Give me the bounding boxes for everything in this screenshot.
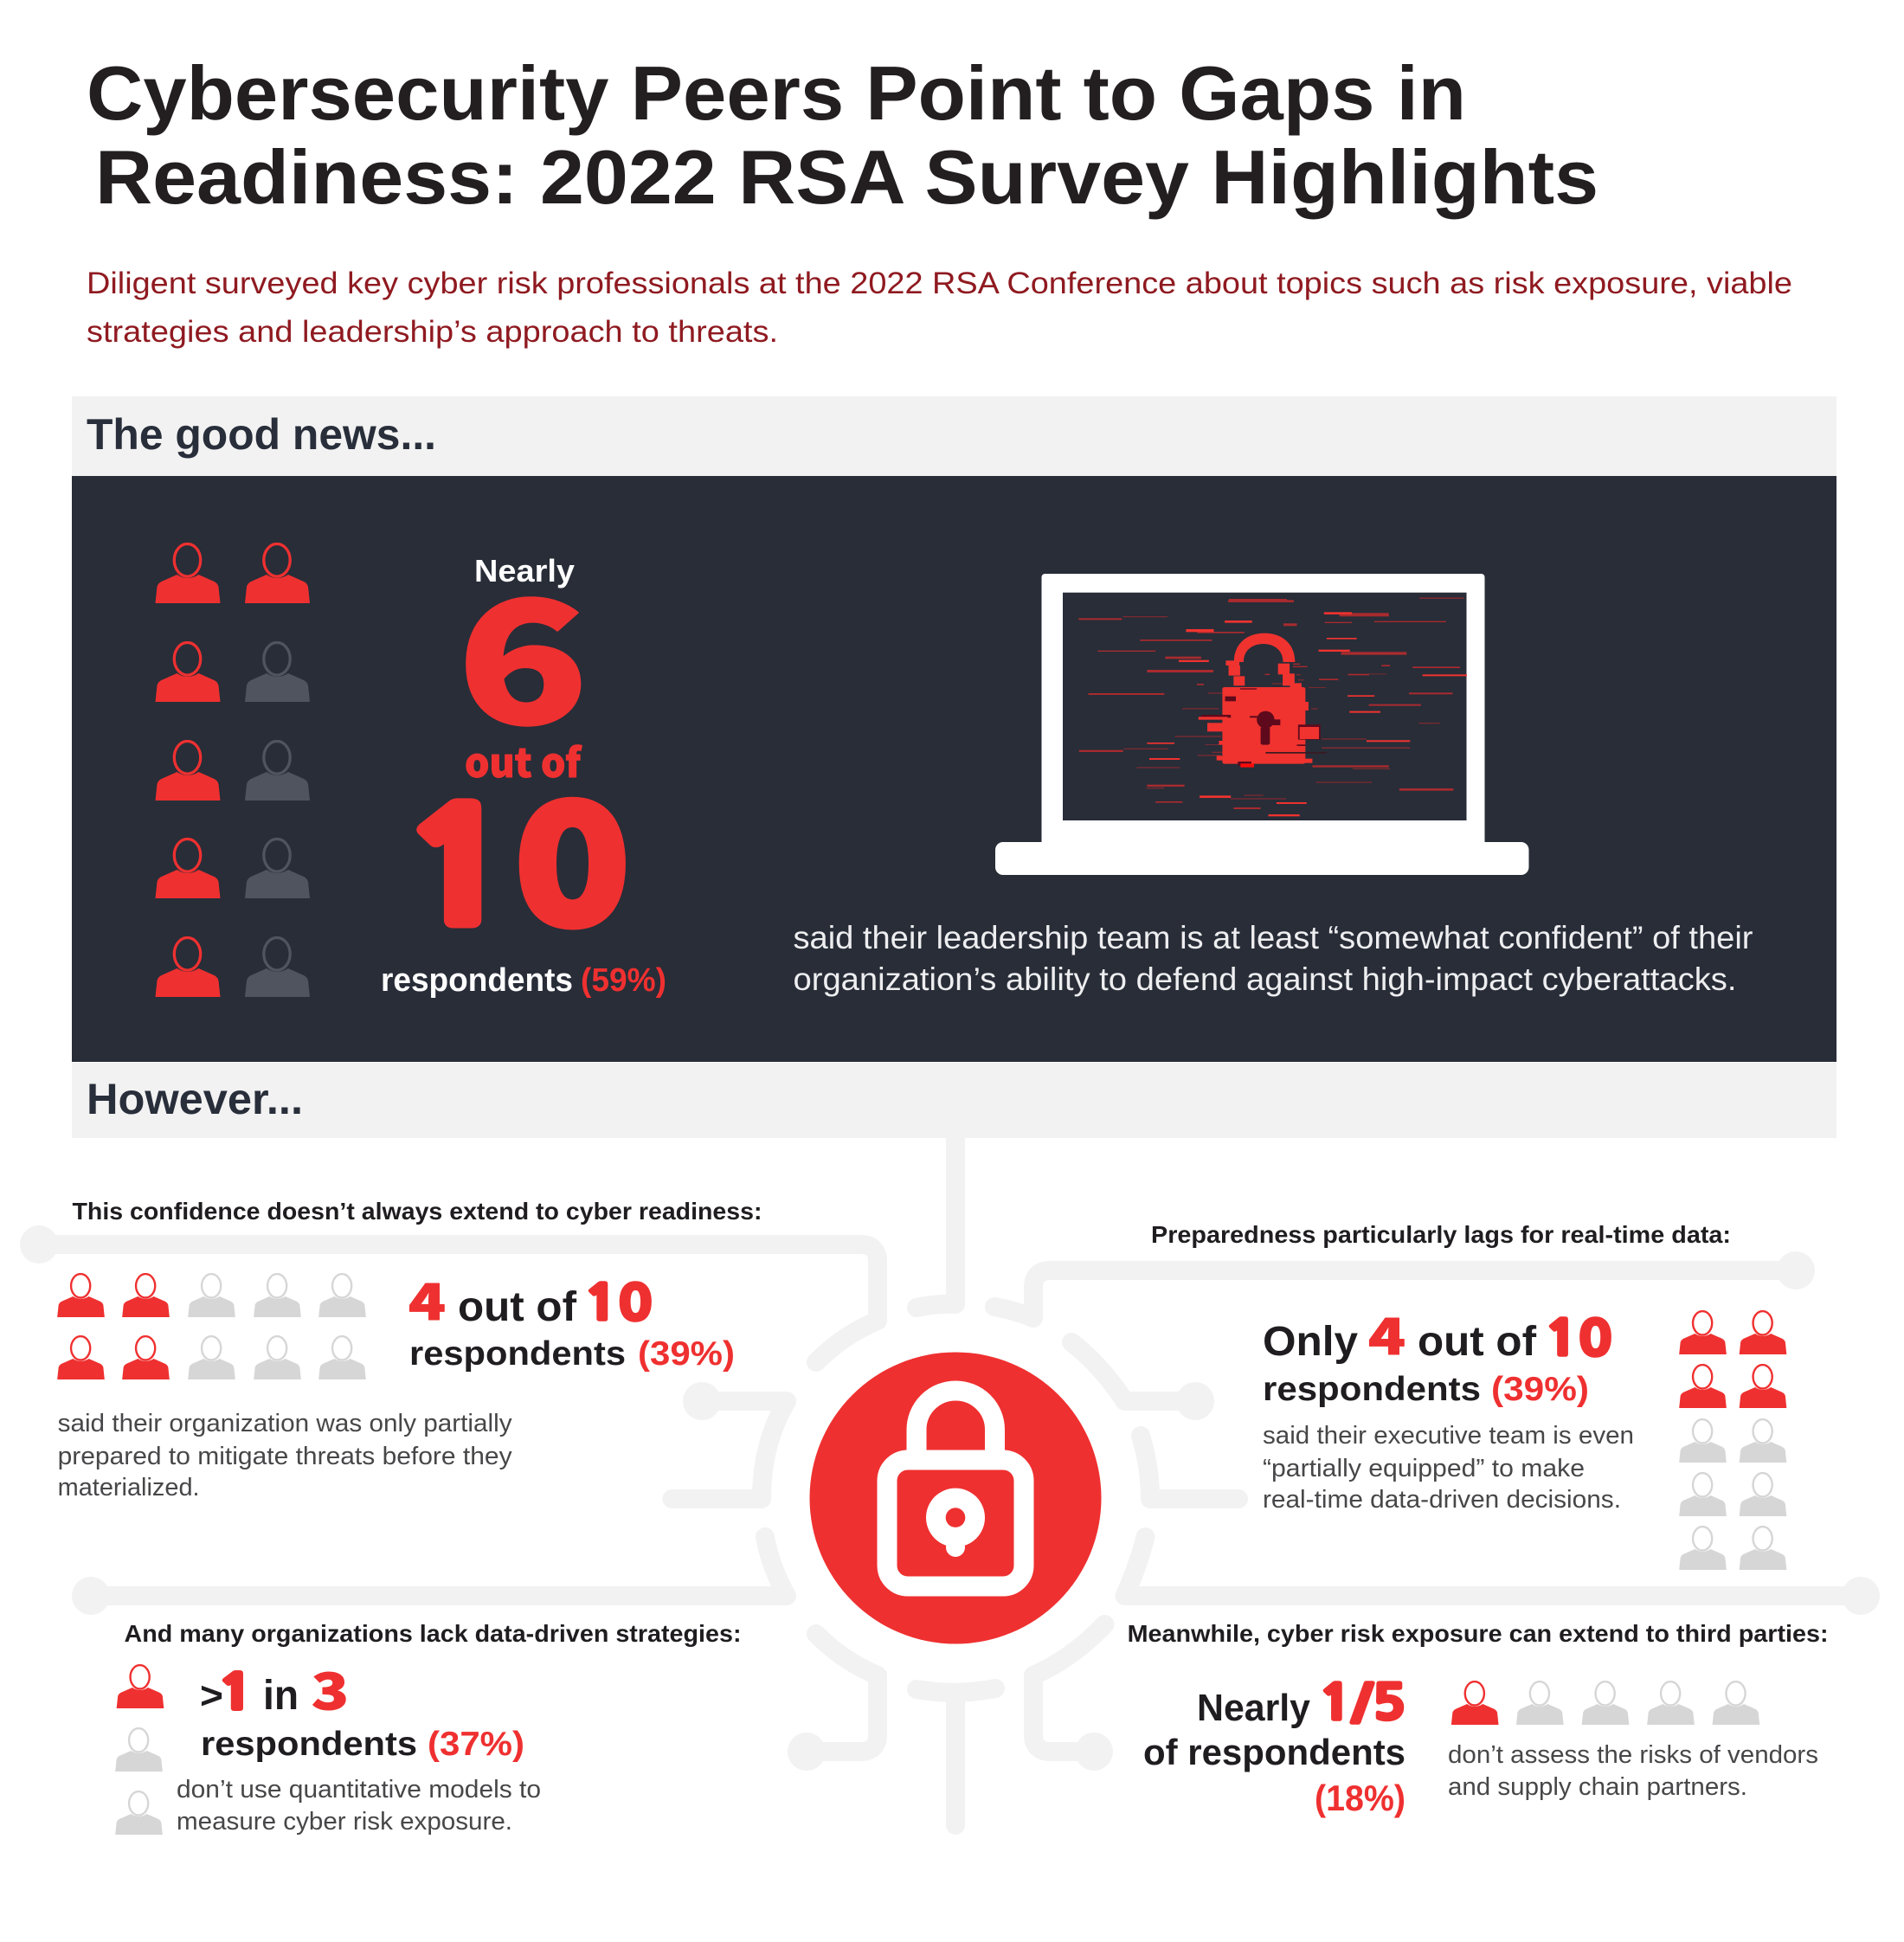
intro text: [87, 267, 1792, 349]
stat: only 4 out of 10: respondents: [1263, 1371, 1481, 1408]
text: [1448, 1741, 1818, 1801]
stat: only 4 out of 10: out of: [1418, 1319, 1537, 1365]
pictogram: 4 of 10 people: [57, 1274, 366, 1379]
text: materialized.: [58, 1474, 200, 1502]
icon: central red padlock: [810, 1352, 1101, 1644]
panel: however header: [72, 1063, 1836, 1138]
stat: 4 out of 10: [408, 1262, 735, 1373]
stat: 4 out of 10: 4: [408, 1262, 446, 1334]
intro text: strategies and leadership’s approach to threats.: [87, 315, 778, 349]
stat: nearly 1/5: 1/5: [1319, 1679, 1405, 1727]
text: leadership confidence: said their leadership team is at least “somewhat confident” of their: [793, 920, 1753, 955]
section: real-time data: [1151, 1221, 1786, 1570]
title: [87, 50, 1598, 220]
icon: laptop with glitched padlock: [995, 574, 1528, 875]
stat: nearly 6 out of 10: (59%): [581, 962, 666, 999]
text: [177, 1776, 541, 1836]
stat: more than 1 in 3: (37%): [428, 1726, 524, 1763]
section: cyber readiness: [57, 1198, 762, 1502]
heading: This confidence doesn’t always extend to cyber readiness:: [73, 1198, 762, 1225]
stat: 4 out of 10: (39%): [638, 1335, 735, 1373]
text: measure cyber risk exposure.: [177, 1808, 512, 1836]
text: don’t use quantitative models to: [177, 1776, 541, 1804]
section: data-driven strategies: [115, 1620, 741, 1836]
heading: Meanwhile, cyber risk exposure can extend to third parties:: [1128, 1620, 1829, 1647]
stat: nearly 1/5: [1143, 1679, 1405, 1818]
title: Readiness: 2022 RSA Survey Highlights: [95, 134, 1598, 220]
text: real-time data-driven decisions.: [1263, 1486, 1621, 1514]
text: “partially equipped” to make: [1263, 1455, 1585, 1482]
stat: only 4 out of 10: Only: [1263, 1319, 1358, 1365]
text: [1263, 1422, 1634, 1514]
text: don’t assess the risks of vendors: [1448, 1741, 1818, 1769]
heading: And many organizations lack data-driven strategies:: [125, 1620, 741, 1647]
stat: nearly 6 out of 10: respondents: [381, 962, 573, 999]
stat: more than 1 in 3: 3: [312, 1651, 349, 1724]
pictogram: 1 of 3 people: [115, 1665, 164, 1835]
section: third parties: [1128, 1620, 1829, 1818]
panel: dark good news: [72, 476, 1836, 1062]
heading: however: However...: [87, 1075, 303, 1123]
text: leadership confidence: organization’s ability to defend against high-impact cyberattacks.: [793, 961, 1736, 997]
text: and supply chain partners.: [1448, 1773, 1747, 1801]
stat: only 4 out of 10: 10: [1545, 1315, 1611, 1362]
intro text: Diligent surveyed key cyber risk professionals at the 2022 RSA Conference about topics such as risk exposure, viable: [87, 267, 1792, 300]
stat: more than 1 in 3: respondents: [201, 1726, 417, 1763]
stat: only 4 out of 10: (39%): [1491, 1371, 1589, 1408]
stat: nearly 6 out of 10: 10: [403, 791, 626, 945]
text: said their executive team is even: [1263, 1422, 1634, 1450]
stat: more than 1 in 3: 1: [218, 1669, 254, 1716]
stat: 4 out of 10: 10: [584, 1279, 652, 1327]
stat: only 4 out of 10: [1263, 1296, 1611, 1408]
heading: Preparedness particularly lags for real-time data:: [1151, 1221, 1731, 1248]
text: [58, 1410, 512, 1502]
stat: 4 out of 10: out of: [458, 1284, 577, 1330]
circuit lines around central lock: [20, 1134, 1880, 1825]
stat: nearly 6 out of 10: out of: [465, 732, 582, 789]
text: said their organization was only partially: [58, 1410, 512, 1437]
pictogram: 4 of 10 people: [1679, 1311, 1786, 1570]
stat: nearly 6 out of 10: Nearly: [474, 553, 575, 588]
stat: only 4 out of 10: 4: [1368, 1296, 1405, 1369]
stat: nearly 1/5: (18%): [1315, 1778, 1405, 1818]
stat: nearly 6 out of 10: 6: [457, 525, 589, 773]
stat: nearly 6 out of 10: [381, 525, 666, 999]
stat: nearly 1/5: of respondents: [1143, 1732, 1405, 1772]
heading: the good news: The good news...: [87, 410, 436, 459]
pictogram: 1 of 5 people: [1451, 1682, 1759, 1725]
stat: more than 1 in 3: in: [263, 1673, 299, 1719]
pictogram: 6 of 10 people: [156, 543, 310, 997]
stat: nearly 1/5: Nearly: [1197, 1687, 1311, 1729]
text: prepared to mitigate threats before they: [58, 1443, 512, 1470]
stat: 4 out of 10: respondents: [409, 1335, 626, 1373]
title: Cybersecurity Peers Point to Gaps in: [87, 50, 1466, 136]
stat: more than 1 in 3: [200, 1651, 524, 1763]
panel: the good news header: [72, 396, 1836, 476]
stat: more than 1 in 3: >: [200, 1675, 223, 1717]
text: leadership confidence: [793, 920, 1753, 997]
